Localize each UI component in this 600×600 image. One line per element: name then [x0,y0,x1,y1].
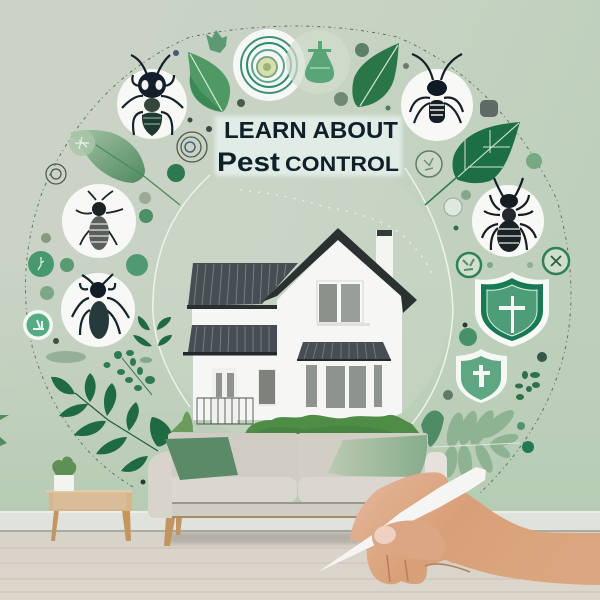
sprig: leaves near lower left circle [133,316,172,346]
sofa: back right [298,433,428,489]
heading line 2: Control: CONTROL [285,152,399,176]
sofa: seat left [166,477,297,503]
icon: spiral left [177,132,207,162]
inner circle tint [153,150,453,450]
icon: spiral far left [46,164,66,184]
finger shadows [387,555,470,582]
pen [318,467,486,572]
icon: ant middle left [62,184,136,258]
sofa: right arm [425,452,447,492]
icon: badge right [543,248,569,274]
sofa [148,433,447,546]
sofa: leg line [166,516,430,518]
sofa: legs [164,518,182,546]
sprig: right green leaves [515,371,540,400]
icon: ant middle right [472,178,544,257]
house: gable roof [262,228,417,313]
icon: green badge circle left [23,310,53,340]
heading line 1: LEARN ABOUT [224,117,399,143]
sprig: small leaves [104,350,155,395]
potted plant [52,457,76,491]
leaf: top left [188,52,230,112]
side table [46,490,132,541]
icon: ant top right [401,54,473,141]
sofa: right pillow [328,435,427,477]
thumb nail [373,524,397,546]
inner dotted ring [240,190,433,277]
large pale fern [421,406,520,480]
branch: lower left leaves [51,373,172,472]
house: porch window [258,369,276,406]
scattered green motifs [40,30,547,484]
icon: ant lower left [61,273,135,347]
sofa: base [164,503,430,518]
leaf: large right [425,122,520,205]
house: upper eave [187,305,277,309]
floor and baseboard [0,511,600,600]
leaf: pale left [69,130,180,205]
table legs [51,510,131,541]
house: porch roof [297,342,391,361]
house: lower left roof [183,325,277,356]
sofa: seat shadow [166,502,428,504]
house: upper left roof [188,263,298,306]
hand [350,472,600,585]
icon: round herb disc [416,151,442,177]
house [170,228,420,434]
small blurred leaves at left edge [0,415,9,446]
house: walls [192,238,402,420]
leaf: top right [352,43,399,107]
sofa: seat right [298,477,428,503]
icon: green disc left [28,251,54,277]
outer dashed ring [25,26,571,493]
house: bay windows [306,365,382,408]
thumb [372,521,445,560]
hand holding pen [318,467,600,585]
house: door [212,368,237,423]
table body [49,491,132,511]
icon: green bottle [286,30,350,94]
inner white ring [153,168,453,430]
panel: title [215,116,402,177]
house: upper window [317,281,370,326]
house: balcony railing [197,398,253,424]
icon: ant top left [117,55,187,139]
icon: badge lower right [457,253,481,277]
icon: small shield [456,349,507,403]
heading line 2: Pest: Pest [217,147,280,177]
icon: large shield [475,272,549,347]
icon: spiral circle [233,29,305,101]
sofa: back left [168,433,298,489]
sofa: left pillow [165,437,238,480]
house: chimney [376,230,393,280]
house: grass [170,411,420,434]
sofa: left arm [148,451,172,518]
